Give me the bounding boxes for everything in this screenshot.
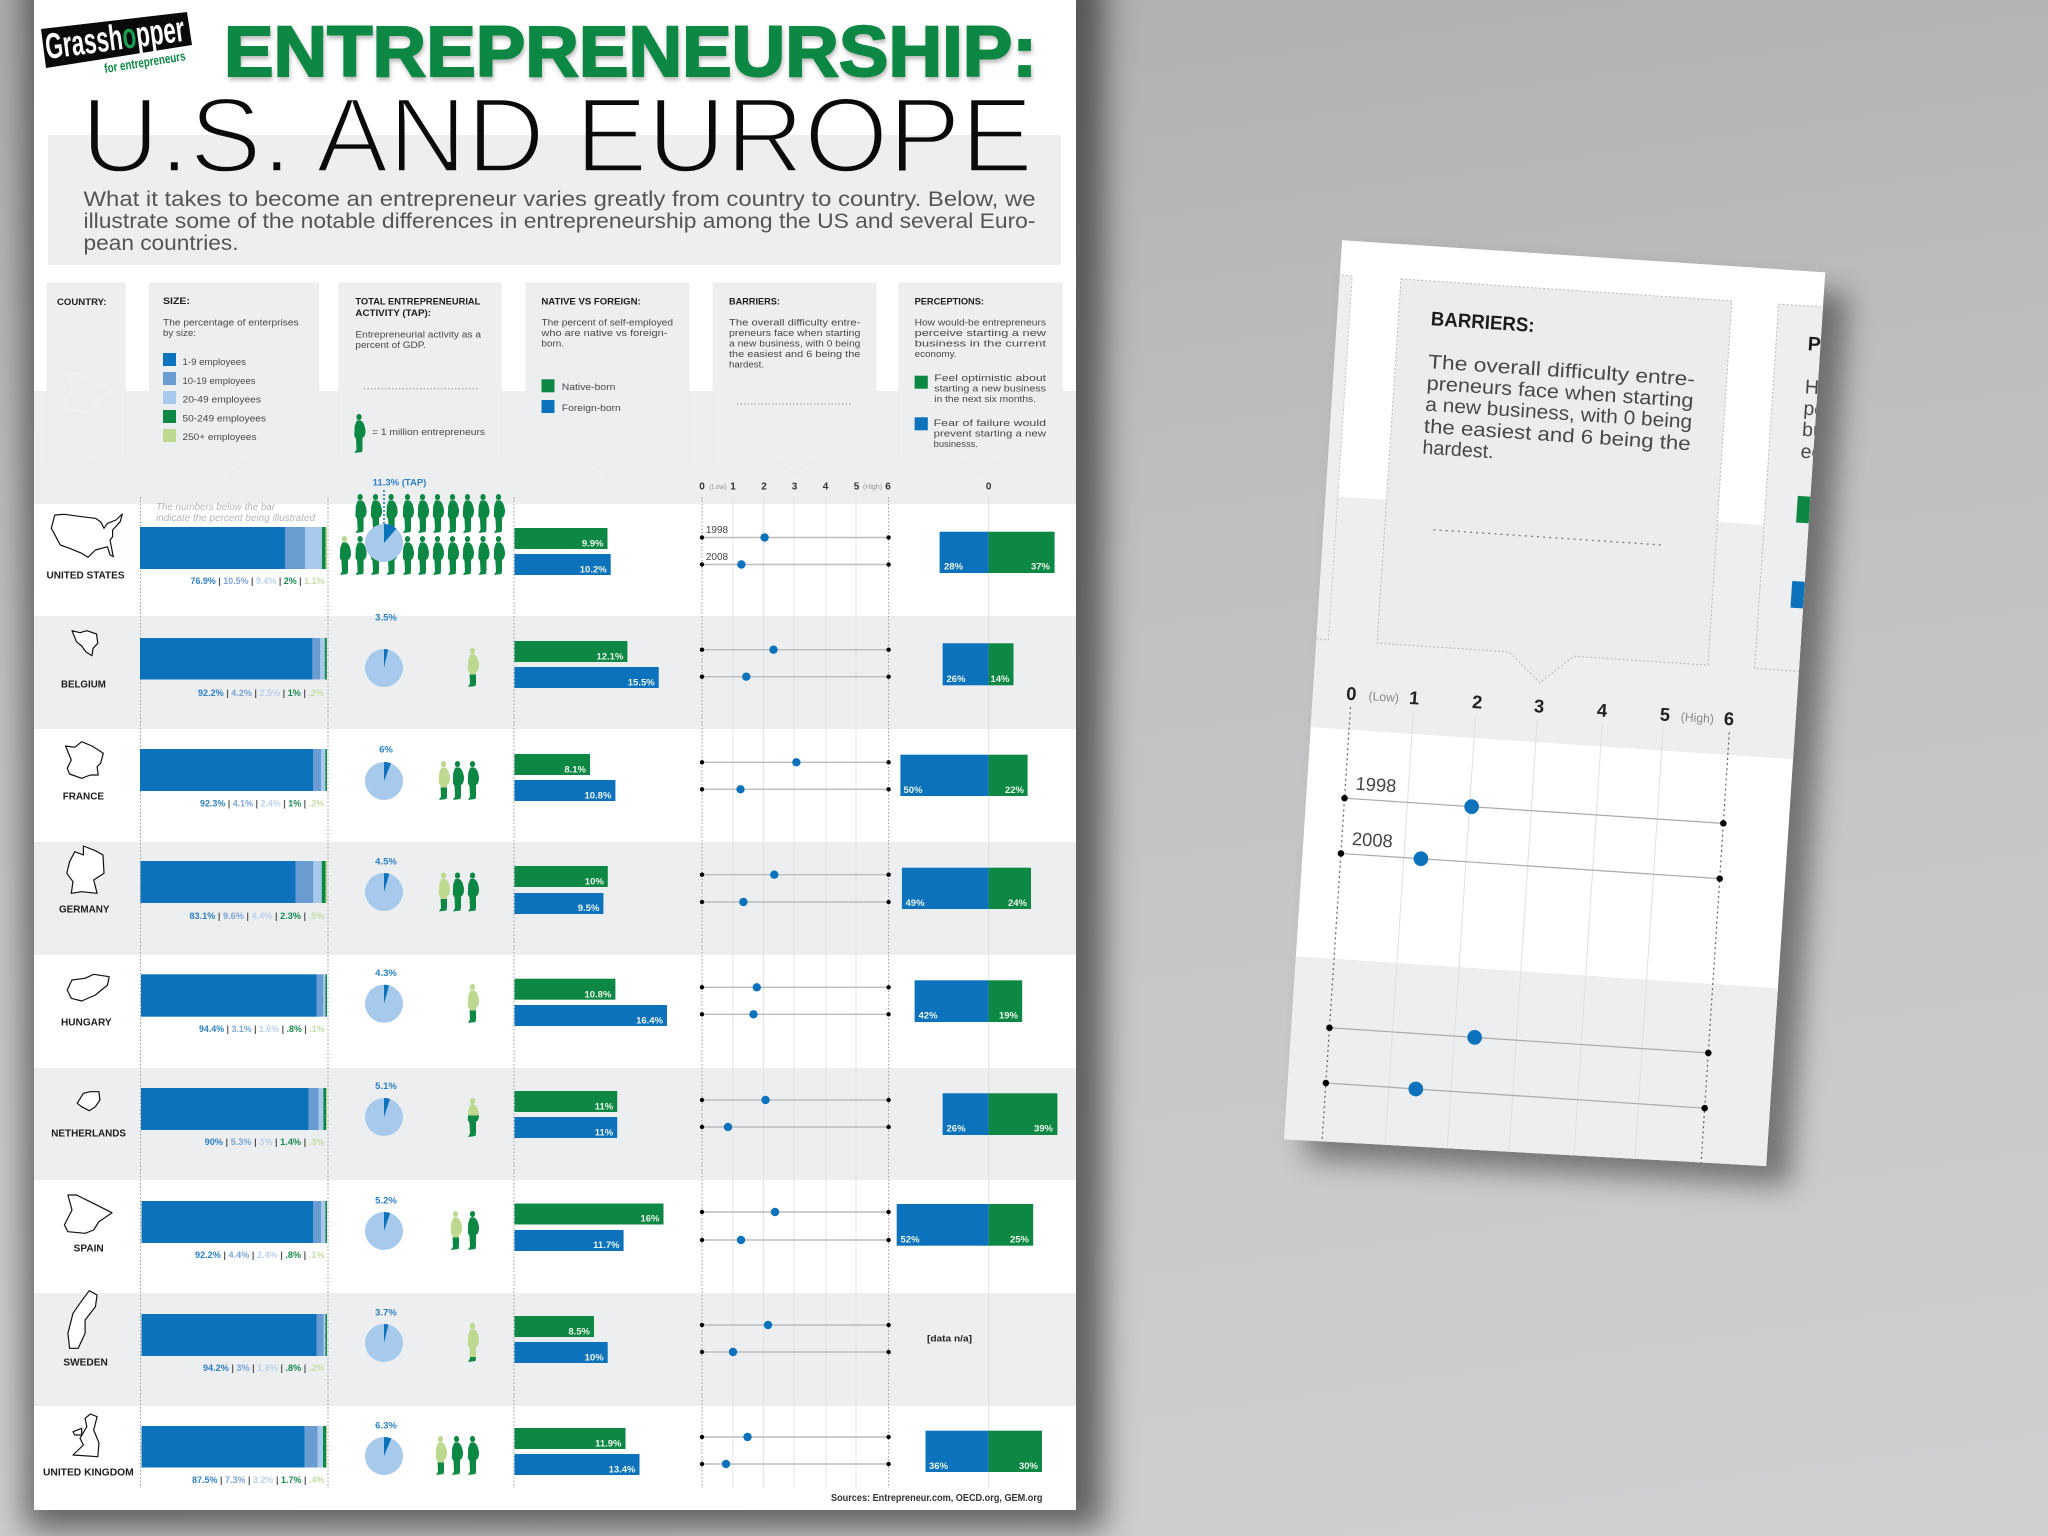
map: Hungary: [67, 974, 109, 1001]
panel: country: COUNTRY:: [57, 297, 106, 308]
legend band: [34, 391, 1076, 504]
card: axis labels: (Low): [1368, 689, 1399, 705]
panel: barriers: hardest.: [729, 359, 764, 370]
panel: perceptions: PERCEPTIONS:: [915, 296, 984, 308]
panel: barriers: a new business, with 0 being: [729, 338, 860, 349]
native vs foreign bars: Netherlands: 11%: [595, 1128, 614, 1138]
pie: Belgium TAP: 3.5%: [375, 612, 397, 624]
legend: enterprise sizes: 10-19 employees: [182, 376, 256, 387]
perceptions: Hungary: 42%: [918, 1010, 938, 1022]
panel: native vs foreign: who are native vs foreign-: [540, 328, 667, 339]
Grasshopper logo: Grasshopper: [43, 8, 187, 67]
perceptions: Belgium: 26%: [946, 674, 966, 685]
panel: country: [47, 283, 125, 473]
poster: entrepreneurship infographic: [34, 0, 1076, 1510]
card: axis labels: 1: [1409, 687, 1420, 709]
size bar: Belgium: [140, 638, 327, 680]
label: United States: UNITED STATES: [46, 570, 125, 582]
poster drop shadow: [26, 0, 1104, 1530]
panel: perceptions: How would-be entrepreneurs: [915, 318, 1046, 328]
size values: France: 92.3% | 4.1% | 2.4% | 1% | .2%: [200, 798, 324, 808]
card: barriers panel: hardest.: [1422, 437, 1494, 463]
panel: native vs foreign: The percent of self-employed: [541, 318, 673, 328]
size bar: Hungary: [141, 974, 327, 1017]
map: Germany: [67, 846, 104, 893]
size values: Belgium: 92.2% | 4.2% | 2.5% | 1% | .2%: [198, 688, 324, 698]
card: perceptions panel edge: [1754, 304, 1823, 672]
row: Belgium: [61, 612, 1014, 698]
label: Hungary: HUNGARY: [61, 1018, 112, 1028]
native vs foreign bars: Spain: 11.7%: [593, 1240, 620, 1251]
perceptions: France: 22%: [1005, 785, 1025, 796]
panel: native vs foreign: born.: [541, 338, 564, 350]
perceptions: United States: 28%: [944, 562, 964, 572]
perceptions: Netherlands: [943, 1093, 1057, 1135]
size values: Netherlands: 90% | 5.3% | 3% | 1.4% | .3%: [205, 1137, 325, 1147]
pie: Germany TAP: [365, 856, 403, 911]
card: axis labels: (High): [1680, 710, 1714, 726]
barrier axis labels: 6: [885, 482, 891, 492]
size bar: Spain: [142, 1201, 327, 1243]
native vs foreign bars: Belgium: [514, 641, 659, 688]
card: barriers panel: preneurs face when starting: [1426, 373, 1694, 412]
barriers: United States: 2008: [706, 552, 729, 563]
pie: Netherlands TAP: [365, 1081, 403, 1136]
card: barriers panel: [1375, 279, 1732, 694]
people: Spain: [451, 1211, 479, 1250]
panel: barriers: BARRIERS:: [729, 296, 780, 308]
label: Netherlands: NETHERLANDS: [51, 1128, 126, 1140]
native vs foreign bars: United Kingdom: 13.4%: [609, 1464, 636, 1476]
size note: indicate the percent being illustrated: [156, 513, 315, 524]
header band: [48, 135, 1061, 265]
intro text: What it takes to become an entrepreneur varies greatly from country to country. Below, we: [84, 187, 1036, 211]
label: United Kingdom: UNITED KINGDOM: [43, 1468, 134, 1478]
barrier axis labels: 5: [854, 482, 860, 492]
map: United Kingdom: [73, 1414, 99, 1457]
panel: perceptions: in the next six months.: [934, 394, 1036, 405]
map: United States: [51, 514, 122, 557]
native vs foreign bars: Sweden: 8.5%: [568, 1326, 591, 1338]
card: barriers panel: BARRIERS:: [1430, 308, 1535, 337]
native vs foreign bars: Netherlands: 11%: [595, 1102, 614, 1112]
alternate row bands: [34, 616, 1076, 1406]
perceptions: Netherlands: 26%: [946, 1124, 966, 1134]
pie: Sweden TAP: 3.7%: [375, 1308, 397, 1318]
panel: size: [150, 283, 319, 475]
size bar: Sweden: [142, 1314, 327, 1356]
row: Netherlands: [51, 1081, 1057, 1147]
row: Sweden: [63, 1291, 972, 1373]
size note: [156, 502, 315, 524]
panel: native vs foreign: Native-born: [562, 382, 615, 393]
card: axis labels: 4: [1596, 699, 1609, 721]
label: Sweden: SWEDEN: [63, 1358, 108, 1368]
panel: perceptions: business in the current: [915, 338, 1046, 349]
native vs foreign bars: Sweden: 10%: [585, 1352, 604, 1364]
perceptions: Spain: [897, 1204, 1033, 1246]
native vs foreign bars: Spain: [514, 1204, 664, 1251]
pie: Spain TAP: [365, 1196, 403, 1250]
barrier axis labels: 3: [792, 482, 798, 492]
panel: size: by size:: [163, 328, 196, 339]
size bar: United Kingdom: [142, 1426, 327, 1468]
barriers: United States: 1998: [706, 525, 729, 536]
title: U.S. AND EUROPE: U.S. AND EUROPE: [81, 75, 1033, 195]
size values: United States: 76.9% | 10.5% | 9.4% | 2% | 1.1%: [190, 576, 324, 586]
label: Germany: GERMANY: [59, 904, 110, 916]
panel: total entrepreneurial activity: ACTIVITY (TAP):: [355, 308, 431, 319]
barrier axis labels: 4: [823, 482, 829, 492]
barriers: Spain: [700, 1208, 891, 1244]
people: Netherlands: [468, 1098, 479, 1137]
barriers: Netherlands: [700, 1096, 891, 1131]
barriers: Hungary: [700, 983, 891, 1018]
pie: France TAP: 6%: [379, 744, 393, 756]
map: Spain: [64, 1195, 112, 1233]
intro text: [84, 187, 1036, 255]
pie: United Kingdom TAP: [365, 1420, 403, 1475]
barriers: Sweden: [700, 1321, 891, 1356]
size values: Sweden: 94.2% | 3% | 1.8% | .8% | .2%: [203, 1363, 325, 1373]
label: France: FRANCE: [63, 792, 104, 802]
native vs foreign bars: Belgium: 15.5%: [628, 678, 655, 688]
native vs foreign bars: United Kingdom: [514, 1428, 640, 1476]
card: perceptions panel edge: business: [1801, 419, 1880, 446]
native vs foreign bars: Netherlands: [514, 1091, 617, 1138]
pie: United Kingdom TAP: 6.3%: [375, 1420, 397, 1432]
panel: total entrepreneurial activity: percent of GDP.: [355, 340, 426, 351]
native vs foreign bars: Hungary: 10.8%: [584, 990, 612, 1000]
panel: perceptions: economy.: [915, 349, 957, 360]
panel: perceptions: businesss.: [934, 439, 978, 450]
card: axis labels: 3: [1533, 695, 1545, 717]
sources: Sources: Entrepreneur.com, OECD.org, GEM.org: [831, 1493, 1042, 1504]
panel: perceptions: prevent starting a new: [934, 428, 1046, 440]
barriers: France: [700, 758, 891, 794]
perceptions: United Kingdom: [926, 1431, 1042, 1472]
pie: United States TAP: 11.3% (TAP): [373, 478, 426, 488]
pie: France TAP: [365, 744, 403, 800]
barriers: Germany: [700, 870, 891, 906]
card: barriers panel: a new business, with 0 being: [1425, 394, 1693, 433]
pie: United States TAP: [365, 478, 426, 562]
size values: Germany: 83.1% | 9.6% | 4.4% | 2.3% | .5%: [189, 911, 324, 921]
label: Spain: SPAIN: [74, 1244, 104, 1254]
perceptions: Belgium: 14%: [990, 674, 1010, 685]
panel: barriers: the easiest and 6 being the: [729, 349, 860, 360]
card: native panel edge: [1316, 274, 1353, 640]
panel: total entrepreneurial activity: Entrepreneurial activity as a: [355, 330, 482, 340]
perceptions: France: 50%: [904, 785, 923, 796]
barrier axis labels: (Low): [709, 484, 727, 491]
pie: Sweden TAP: [365, 1308, 403, 1362]
panel: barriers: preneurs face when starting: [729, 328, 860, 339]
panel: total entrepreneurial activity: = 1 million entrepreneurs: [372, 427, 485, 438]
map: Sweden: [68, 1291, 97, 1348]
panel: perceptions: Feel optimistic about: [934, 373, 1046, 384]
size note: The numbers below the bar: [156, 502, 276, 513]
row: France: [63, 742, 1028, 808]
people: France: [439, 761, 479, 800]
barriers: United States: [700, 525, 891, 569]
card: perceptions panel edge: PERCEPTIONS:: [1807, 333, 1955, 365]
legend: enterprise sizes: 250+ employees: [182, 432, 257, 443]
card shadow: [1306, 262, 1848, 1186]
perceptions: Belgium: [943, 643, 1014, 685]
barrier axis labels: 2: [761, 482, 767, 492]
native vs foreign bars: United States: [514, 528, 611, 576]
size values: Hungary: 94.4% | 3.1% | 1.6% | .8% | .1%: [199, 1024, 324, 1034]
card: axis labels: 2: [1471, 691, 1483, 713]
size bar: United States: [140, 527, 327, 569]
size bar: Germany: [140, 861, 327, 903]
card: perceptions panel edge: economy.: [1800, 441, 1884, 468]
pie: Hungary TAP: [365, 968, 403, 1023]
panel: size: SIZE:: [163, 296, 190, 307]
perceptions: Sweden data not available: [data n/a]: [927, 1334, 972, 1344]
panel: total entrepreneurial activity: [339, 283, 501, 475]
legend: enterprise sizes: 1-9 employees: [182, 357, 246, 368]
row: Germany: [59, 846, 1031, 921]
intro text: illustrate some of the notable differences in entrepreneurship among the US and several Euro-: [84, 209, 1036, 233]
barriers: Belgium: [700, 646, 891, 681]
size bar: France: [140, 749, 327, 791]
row: Hungary: [61, 968, 1022, 1034]
legend: enterprise sizes: 20-49 employees: [182, 394, 261, 406]
native vs foreign bars: Sweden: [514, 1316, 608, 1364]
title: ENTREPRENEURSHIP: ENTREPRENEURSHIP:: [224, 13, 1037, 92]
people: Sweden: [468, 1323, 479, 1362]
card: barrier markers United States: [1337, 772, 1728, 886]
icon: one million entrepreneurs: [354, 414, 366, 453]
legend: enterprise sizes: 50-249 employees: [182, 414, 266, 424]
native vs foreign bars: Germany: [514, 866, 608, 914]
pie: Spain TAP: 5.2%: [375, 1196, 397, 1206]
barriers: United Kingdom: [700, 1433, 891, 1468]
people: Hungary: [468, 984, 479, 1023]
people: Belgium: [468, 648, 479, 687]
panel: native vs foreign: Foreign-born: [562, 403, 621, 414]
perceptions: Germany: 24%: [1008, 898, 1028, 909]
perceptions: Netherlands: 39%: [1034, 1124, 1054, 1134]
barrier axis labels: 0: [699, 482, 705, 492]
panel: perceptions: perceive starting a new: [915, 328, 1046, 339]
perceptions: United States: [940, 532, 1055, 573]
panel: barriers: The overall difficulty entre-: [729, 318, 860, 328]
card: perceptions panel edge: How would-be: [1804, 376, 1929, 406]
pie: Netherlands TAP: 5.1%: [375, 1081, 397, 1092]
pie: Hungary TAP: 4.3%: [375, 968, 397, 979]
pie: Belgium TAP: [365, 612, 403, 687]
panel: total entrepreneurial activity: TOTAL ENTREPRENEURIAL: [355, 296, 481, 308]
card: axis labels: 0: [1346, 683, 1357, 704]
native vs foreign bars: Belgium: 12.1%: [596, 652, 624, 662]
people: United States: [340, 494, 505, 575]
panel: native vs foreign: NATIVE VS FOREIGN:: [541, 296, 641, 308]
card: axis labels: 5: [1659, 703, 1671, 725]
map: France: [66, 742, 103, 778]
panel: perceptions: Fear of failure would: [934, 418, 1046, 429]
perceptions: Germany: 49%: [906, 898, 925, 909]
perceptions: United Kingdom: 36%: [929, 1461, 949, 1472]
pie: Germany TAP: 4.5%: [375, 856, 397, 868]
people: United Kingdom: [436, 1436, 479, 1475]
card: enlarged barriers detail: [1284, 240, 1826, 1166]
perceptions: France: [900, 755, 1028, 796]
panel: size: The percentage of enterprises: [163, 318, 299, 328]
people: Germany: [439, 872, 479, 912]
panel: barriers: [713, 283, 876, 475]
panel: perceptions: starting a new business: [934, 384, 1046, 394]
card: barrier markers United States: 1998: [1355, 773, 1397, 796]
card: perceptions panel edge: perceive: [1803, 398, 1878, 425]
legend: enterprise sizes: [163, 353, 266, 443]
barrier axis labels: 0: [986, 482, 992, 492]
perceptions: Hungary: [915, 980, 1022, 1022]
perceptions: United Kingdom: 30%: [1019, 1461, 1039, 1472]
barrier axis labels: (High): [863, 484, 882, 491]
native vs foreign bars: United Kingdom: 11.9%: [595, 1438, 622, 1450]
native vs foreign bars: France: 8.1%: [564, 764, 587, 776]
size values: United Kingdom: 87.5% | 7.3% | 3.2% | 1.7% | .4%: [192, 1475, 324, 1485]
size values: Spain: 92.2% | 4.4% | 2.4% | .8% | .1%: [195, 1250, 324, 1260]
perceptions: Spain: 52%: [900, 1234, 920, 1246]
card: axis labels: 6: [1723, 708, 1735, 729]
native vs foreign bars: Hungary: 16.4%: [636, 1016, 664, 1026]
label: Belgium: BELGIUM: [61, 680, 106, 690]
perceptions: Hungary: 19%: [999, 1010, 1019, 1022]
intro text: pean countries.: [84, 231, 238, 255]
perceptions: Spain: 25%: [1010, 1234, 1030, 1246]
native vs foreign bars: Germany: 10%: [585, 876, 604, 888]
size bar: Netherlands: [141, 1088, 327, 1130]
card: barrier markers United States: 2008: [1351, 828, 1393, 852]
card: guide lines: [1322, 707, 1729, 1172]
panel: perceptions: [899, 283, 1062, 475]
barrier axis labels: 1: [730, 482, 736, 492]
card: axis labels: [1346, 687, 1734, 726]
perceptions: United States: 37%: [1031, 562, 1051, 572]
native vs foreign bars: France: [514, 754, 615, 802]
native vs foreign bars: United States: 10.2%: [580, 564, 607, 576]
column guide lines: [140, 497, 989, 1488]
row: Spain: [64, 1195, 1033, 1260]
barrier axis labels: [699, 482, 992, 492]
row: United Kingdom: [43, 1414, 1042, 1485]
row: United States: [46, 478, 1055, 586]
card: barriers panel: The overall difficulty entre-: [1427, 351, 1696, 391]
native vs foreign bars: France: 10.8%: [584, 790, 612, 802]
perceptions: Germany: [902, 868, 1031, 909]
map: Belgium: [72, 631, 98, 656]
native vs foreign bars: Spain: 16%: [640, 1214, 660, 1224]
native vs foreign bars: United States: 9.9%: [582, 538, 604, 550]
card: barrier markers Belgium: [1322, 1020, 1712, 1116]
panel: native vs foreign: [526, 283, 689, 475]
native vs foreign bars: Germany: 9.5%: [578, 903, 600, 914]
Grasshopper logo: for entrepreneurs: [103, 48, 186, 76]
card: barriers panel: the easiest and 6 being the: [1423, 416, 1691, 455]
map: Netherlands: [77, 1092, 100, 1111]
native vs foreign bars: Hungary: [514, 979, 667, 1026]
